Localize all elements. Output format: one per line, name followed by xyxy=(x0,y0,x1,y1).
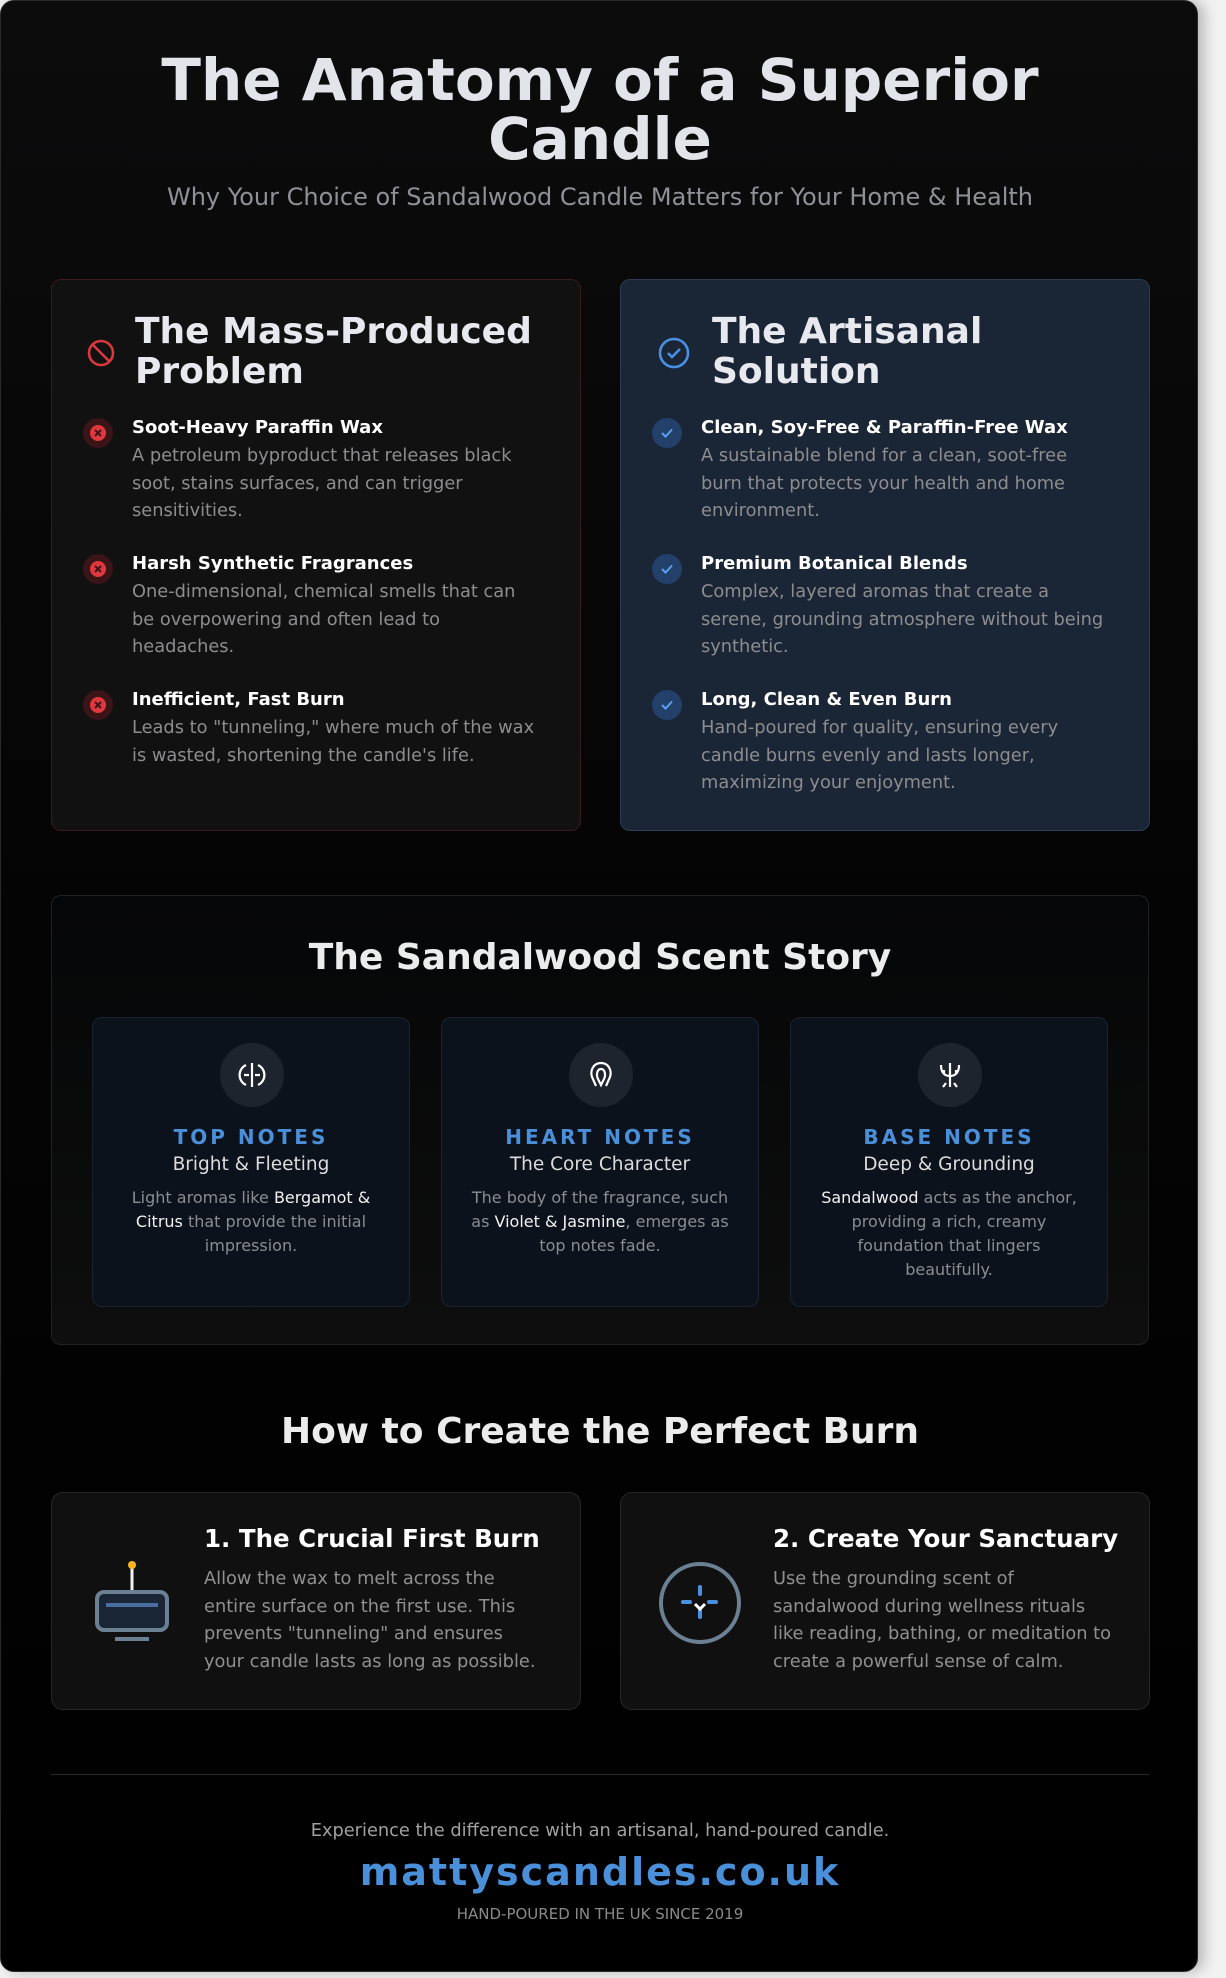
panel: solution xyxy=(620,279,1150,831)
card: heart notes: as Violet & Jasmine, emerges as xyxy=(471,1212,729,1231)
item: fragrances: be overpowering and often lead to xyxy=(132,608,440,630)
icon: top notes xyxy=(220,1043,284,1107)
item: even burn: Hand-poured for quality, ensuring every xyxy=(701,717,1058,738)
footer text: Experience the difference with an artisanal, hand-poured candle. xyxy=(311,1820,889,1841)
card: heart notes: The body of the fragrance, such xyxy=(472,1188,728,1207)
card: heart notes xyxy=(441,1017,759,1307)
item: botanical: Premium Botanical Blends xyxy=(701,553,968,574)
card: first burn: entire surface on the first use. This xyxy=(204,1596,515,1617)
item: even burn: maximizing your enjoyment. xyxy=(701,772,956,793)
heading: problem: The Mass-Produced xyxy=(135,311,532,352)
heading: solution: Solution xyxy=(712,351,881,392)
item: fragrances xyxy=(83,553,515,657)
item: burn: Inefficient, Fast Burn xyxy=(132,689,345,710)
heading: problem xyxy=(135,311,532,392)
icon: base notes xyxy=(918,1043,982,1107)
card: heart notes: top notes fade. xyxy=(539,1236,661,1255)
card: sanctuary: like reading, bathing, or meditation to xyxy=(773,1623,1111,1644)
item: burn: Leads to "tunneling," where much of the wax xyxy=(132,717,534,738)
icon: sanctuary xyxy=(659,1562,741,1644)
panel: problem xyxy=(51,279,581,831)
heading: scent story: The Sandalwood Scent Story xyxy=(309,937,891,978)
title: The Anatomy of a Superior xyxy=(161,46,1039,114)
card: sanctuary: create a powerful sense of calm. xyxy=(773,1651,1063,1672)
item: botanical xyxy=(652,553,1103,657)
card: base notes: Sandalwood acts as the anchor, xyxy=(821,1188,1077,1207)
item: wax: environment. xyxy=(701,500,820,521)
item: even burn: candle burns evenly and lasts longer, xyxy=(701,744,1035,766)
card: top notes xyxy=(92,1017,410,1307)
card: base notes: BASE NOTES xyxy=(863,1125,1035,1149)
card: sanctuary: sandalwood during wellness rituals xyxy=(773,1596,1085,1617)
item: fragrances: Harsh Synthetic Fragrances xyxy=(132,553,413,574)
item: wax: Clean, Soy-Free & Paraffin-Free Wax xyxy=(701,417,1068,438)
item: even burn: Long, Clean & Even Burn xyxy=(701,689,952,710)
card: base notes: foundation that lingers xyxy=(858,1236,1040,1255)
card: first burn: your candle lasts as long as possible. xyxy=(204,1651,536,1672)
title: Candle xyxy=(488,105,712,173)
card: sanctuary: 2. Create Your Sanctuary xyxy=(773,1524,1118,1553)
card: top notes: Citrus that provide the initial xyxy=(136,1212,366,1231)
item: paraffin: A petroleum byproduct that releases black xyxy=(132,445,512,466)
panel: scent story xyxy=(51,895,1149,1345)
card: top notes: TOP NOTES xyxy=(174,1125,328,1149)
heading: solution xyxy=(712,311,982,392)
item: paraffin: Soot-Heavy Paraffin Wax xyxy=(132,417,383,438)
title xyxy=(161,46,1039,173)
item: wax: burn that protects your health and home xyxy=(701,472,1065,494)
card: base notes xyxy=(790,1017,1108,1307)
heading: problem: Problem xyxy=(135,351,304,392)
card: base notes: Deep & Grounding xyxy=(863,1154,1035,1175)
subtitle: Why Your Choice of Sandalwood Candle Matters for Your Home & Health xyxy=(167,183,1033,211)
item: paraffin xyxy=(83,417,512,521)
card: sanctuary: Use the grounding scent of xyxy=(773,1568,1014,1589)
footer url: mattyscandles.co.uk xyxy=(360,1850,840,1894)
card: heart notes: HEART NOTES xyxy=(505,1125,695,1149)
card: sanctuary xyxy=(620,1492,1150,1710)
item: even burn xyxy=(652,689,1058,793)
item: fragrances: headaches. xyxy=(132,636,234,657)
item: botanical: serene, grounding atmosphere without being xyxy=(701,608,1103,630)
item: botanical: synthetic. xyxy=(701,636,789,657)
footer tagline: HAND-POURED IN THE UK SINCE 2019 xyxy=(457,1905,743,1923)
heading: perfect burn: How to Create the Perfect Burn xyxy=(281,1411,919,1452)
card: base notes: beautifully. xyxy=(905,1260,993,1279)
item: burn xyxy=(83,689,534,766)
card: top notes: Light aromas like Bergamot & xyxy=(132,1188,370,1207)
card: heart notes: The Core Character xyxy=(510,1154,690,1175)
card: first burn: Allow the wax to melt across the xyxy=(204,1568,495,1589)
icon: prohibited xyxy=(88,340,114,366)
item: paraffin: sensitivities. xyxy=(132,500,243,521)
item: paraffin: soot, stains surfaces, and can trigger xyxy=(132,472,463,494)
heading: solution: The Artisanal xyxy=(712,311,982,352)
card: first burn: 1. The Crucial First Burn xyxy=(204,1524,540,1553)
item: wax: A sustainable blend for a clean, soot-free xyxy=(701,445,1067,466)
card: first burn: prevents "tunneling" and ensures xyxy=(204,1623,503,1644)
item: wax xyxy=(652,417,1068,521)
item: fragrances: One-dimensional, chemical smells that can xyxy=(132,581,515,602)
card: first burn xyxy=(51,1492,581,1710)
icon: candle xyxy=(95,1561,169,1641)
item: botanical: Complex, layered aromas that create a xyxy=(701,581,1049,602)
card: top notes: Bright & Fleeting xyxy=(173,1154,329,1175)
card: top notes: impression. xyxy=(205,1236,297,1255)
icon: check circle xyxy=(658,338,690,368)
item: burn: is wasted, shortening the candle's life. xyxy=(132,744,475,766)
icon: heart notes xyxy=(569,1043,633,1107)
card: base notes: providing a rich, creamy xyxy=(852,1212,1046,1231)
